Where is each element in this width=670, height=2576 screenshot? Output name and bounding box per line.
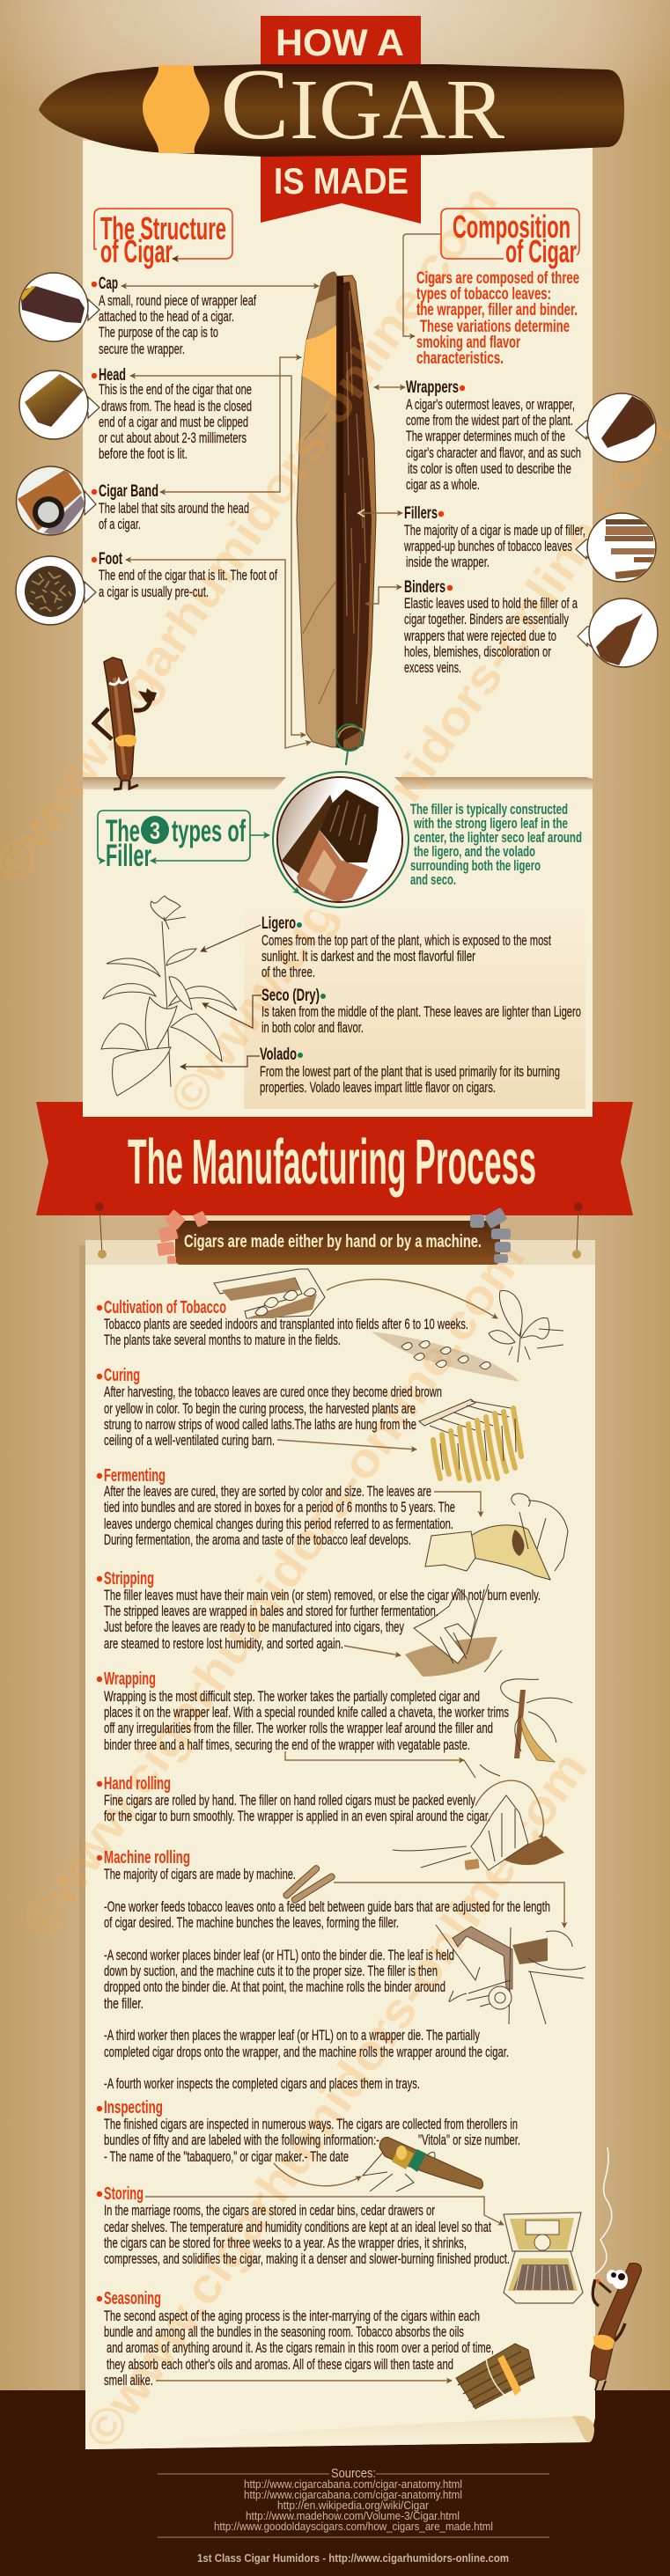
step: storing: In the marriage rooms, the cigars are stored in cedar bins, cedar drawers or [104, 2202, 435, 2219]
step: wrapping: Wrapping is the most difficult step. The worker takes the partially completed cigar and [104, 1688, 480, 1705]
footer credit: 1st Class Cigar Humidors - http://www.cigarhumidors-online.com [197, 2551, 509, 2565]
label: wrappers: cigar as a whole. [406, 476, 480, 493]
step: fermenting: leaves undergo chemical changes during this period referred to as fermentation. [104, 1516, 453, 1532]
step: fermenting: During fermentation, the aroma and taste of the tobacco leaf develops. [104, 1531, 411, 1548]
step: curing: After harvesting, the tobacco leaves are cured once they become dried brown [104, 1383, 442, 1400]
sources: http://www.cigarcabana.com/cigar-anatomy.html [244, 2478, 462, 2491]
step: seasoning [97, 2289, 494, 2389]
label: binders: cigar together. Binders are essentially [404, 611, 569, 627]
illustration: rolling hands [393, 1780, 564, 1870]
label: head: This is the end of the cigar that one [99, 381, 252, 398]
label: fillers: Fillers [404, 504, 438, 523]
label: head: end of a cigar and must be clipped [99, 414, 248, 430]
hanging strings and pins [95, 1202, 583, 1259]
step: hand rolling [97, 1774, 490, 1824]
sources: http://www.goodoldayscigars.com/how_cigars_are_made.html [214, 2521, 493, 2533]
title: is made: IS MADE [274, 160, 409, 202]
label: cap [92, 275, 319, 357]
step: storing: Storing [104, 2184, 144, 2204]
sign: made by hand or machine [157, 1207, 511, 1265]
label: binders [365, 578, 578, 676]
heading: the 3 types of filler: 3 [150, 818, 160, 844]
label: seco [202, 987, 581, 1036]
illustration: cigar inspection: "Vitola" or size number. [418, 2132, 520, 2148]
step: seasoning: The second aspect of the aging process is the inter-marrying of the cigars within each [104, 2308, 480, 2324]
illustration: two cigars and machine arrow [283, 1864, 564, 1927]
heading: composition of cigar: Composition [453, 209, 571, 245]
label: wrappers: cigar's character and flavor, and as such [406, 444, 581, 461]
red manufacturing banner [36, 1102, 633, 1215]
foot detail ring [336, 724, 363, 771]
heading: the 3 types of filler [98, 811, 269, 873]
label: fillers [358, 504, 585, 570]
step: fermenting: tied into bundles and are stored in boxes for a period of 6 months to 5 years. The [104, 1499, 455, 1516]
step: wrapping: binder three and a half times, securing the end of the wrapper with vegatable paste. [104, 1736, 470, 1753]
step: machine rolling: -A fourth worker inspects the completed cigars and places them in trays. [104, 2075, 420, 2092]
mascot: smoking cigar [590, 2147, 641, 2390]
composition description: Cigars are composed of three [416, 269, 579, 288]
step: fermenting: Fermenting [104, 1466, 166, 1486]
heading: the 3 types of filler: types of [172, 814, 246, 848]
illustration: fermenting worker [425, 1492, 568, 1580]
photo: binder leaf [578, 598, 658, 667]
sources: http://www.madehow.com/Volume-3/Cigar.html [246, 2510, 460, 2522]
heading: composition of cigar [403, 209, 579, 336]
heading: the structure of cigar: The Structure [100, 210, 226, 246]
step: machine rolling [97, 1848, 550, 2092]
step: stripping: are steamed to restore lost humidity, and sorted again. [104, 1635, 343, 1652]
illustration: cigar machine [436, 1925, 585, 2024]
label: wrappers: Wrappers [406, 378, 459, 397]
label: volado: properties. Volado leaves impart little flavor on cigars. [260, 1079, 496, 1096]
composition description: characteristics. [416, 349, 504, 368]
photo: foot [16, 556, 96, 625]
step: machine rolling: -A second worker places binder leaf (or HTL) onto the binder die. The leaf is held [104, 1947, 454, 1963]
step: seasoning: Seasoning [104, 2289, 161, 2308]
step: curing: Curing [104, 1366, 140, 1385]
heading: the structure of cigar: of Cigar [100, 233, 173, 269]
step: machine rolling: down by suction, and the machine cuts it to the proper size. The filler is then [104, 1963, 438, 1979]
heading: composition of cigar: of Cigar [505, 233, 577, 269]
step: inspecting: bundles of fifty and are labeled with the following information:- [104, 2132, 379, 2148]
label: seco: Seco (Dry) [261, 987, 320, 1005]
composition description: types of tobacco leaves: [416, 285, 551, 304]
illustration: cigar bundle [156, 2344, 534, 2409]
step: cultivation of tobacco [97, 1298, 468, 1348]
step: machine rolling: dropped onto the binder die. At that point, the machine rolls the binder around [104, 1978, 445, 1995]
heading: the 3 types of filler: Filler [106, 839, 151, 873]
step: hand rolling: Fine cigars are rolled by hand. The filler on hand rolled cigars must be packed evenly [104, 1792, 475, 1809]
label: head [92, 366, 306, 735]
mascot: thumbs up cigar [94, 657, 157, 789]
filler description: the ligero, and the volado [414, 843, 535, 860]
paper curl [85, 2416, 594, 2449]
big cigar cross-section [297, 272, 376, 750]
paper panel: anatomy and filler [83, 123, 593, 1117]
watermark: ©www.cigarhumidors-online.com [158, 407, 670, 1124]
label: ligero: sunlight. It is darkest and the most flavorful filler [261, 948, 475, 965]
label: head: draws from. The head is the closed [101, 398, 252, 415]
step: stripping [97, 1569, 541, 1652]
step: curing [97, 1366, 442, 1449]
filler description: surrounding both the ligero [410, 857, 541, 874]
step: seasoning: smell alike. [104, 2372, 153, 2389]
label: foot: a cigar is usually pre-cut. [99, 583, 209, 600]
photo: wrapper leaf [576, 393, 656, 462]
step: inspecting: - The name of the "tabaquero," or cigar maker.- The date [104, 2148, 349, 2165]
label: cigar band: of a cigar. [99, 516, 141, 532]
filler description: center, the lighter seco leaf around [414, 829, 582, 846]
step: storing [97, 2184, 510, 2267]
heading: the structure of cigar [94, 209, 232, 269]
filler description: with the strong ligero leaf in the [413, 815, 568, 832]
title ribbon [261, 16, 421, 224]
label: binders: excess veins. [404, 659, 461, 676]
label: cap: secure the wrapper. [99, 341, 185, 357]
photo: filler sticks [576, 513, 657, 582]
label: binders: holes, blemishes, discoloration or [404, 643, 551, 660]
step: wrapping: Wrapping [104, 1670, 156, 1689]
watermark: ©www.cigarhumidors-online.com [72, 1742, 598, 2458]
label: foot [92, 550, 311, 748]
step: curing: ceiling of a well-ventilated curing barn. [104, 1432, 275, 1449]
label: foot: Foot [99, 550, 122, 569]
step: cultivation of tobacco: Tobacco plants are seeded indoors and transplanted into fields after 6 to 10 weeks. [104, 1316, 468, 1332]
label: cap: Cap [99, 275, 118, 293]
step: curing: or yellow in color. To begin the curing process, the harvested plants are [104, 1400, 416, 1417]
paper panel: process [85, 1240, 595, 2449]
step: stripping: Just before the leaves are ready to be manufactured into cigars, they [104, 1618, 404, 1635]
label: wrappers: come from the widest part of the plant. [406, 412, 573, 429]
step: seasoning: they absorb each other's oils and aromas. All of these cigars will then taste and [107, 2356, 453, 2373]
composition description: These variations determine [420, 318, 570, 336]
illustration: stripping hands [344, 1584, 502, 1677]
heading: the 3 types of filler: The [106, 814, 140, 848]
illustration: cigar inspection [274, 2132, 520, 2191]
step: hand rolling: Hand rolling [104, 1774, 171, 1794]
label: binders: Elastic leaves used to hold the filler of a [404, 595, 578, 612]
step: fermenting [97, 1466, 455, 1548]
step: inspecting: Inspecting [104, 2098, 163, 2117]
label: seco: in both color and flavor. [261, 1019, 364, 1036]
filler description: and seco. [410, 871, 456, 888]
label: fillers: inside the wrapper. [406, 554, 490, 570]
step: machine rolling: of cigar desired. The machine bunches the leaves, forming the filler. [104, 1914, 399, 1931]
step: seasoning: bundle and among all the bundles in the seasoning room. Tobacco absorbs the oils [104, 2323, 464, 2340]
label: cap: The purpose of the cap is to [99, 324, 218, 341]
label: head: before the foot is lit. [99, 445, 188, 462]
label: binders: wrappers that were rejected due to [403, 627, 556, 644]
label: volado: Volado [260, 1046, 297, 1064]
photo: head [19, 371, 99, 439]
label: head: or cut about about 2-3 millimeters [99, 429, 247, 446]
photo: cigar band [16, 466, 96, 537]
step: cultivation of tobacco: Cultivation of Tobacco [104, 1298, 226, 1317]
hero cigar [39, 64, 624, 157]
label: binders: Binders [404, 578, 445, 597]
footer band [0, 2390, 670, 2576]
step: machine rolling: the filler. [104, 1995, 144, 2012]
label: volado [180, 1046, 560, 1096]
step: stripping: Stripping [104, 1569, 154, 1589]
watermark: ©www.cigarhumidors-online.com [10, 1231, 535, 1948]
photo: cap [19, 273, 99, 341]
step: stripping: The stripped leaves are wrapped in bales and stored for further fermentation. [104, 1603, 438, 1619]
label: wrappers [374, 378, 581, 493]
step: storing: the cigars can be stored for three weeks to a year. As the wrapper dries, it shrinks, [104, 2235, 467, 2251]
illustration: humidor [145, 2197, 583, 2303]
label: head: Head [99, 366, 126, 385]
label: wrappers: The wrapper determines much of the [406, 428, 565, 444]
composition description: smoking and flavor [416, 334, 520, 352]
step: machine rolling: -A third worker then places the wrapper leaf (or HTL) on to a wrapper die. The partially [104, 2027, 480, 2044]
filler description [410, 801, 582, 888]
step: cultivation of tobacco: The plants take several months to mature in the fields. [104, 1332, 341, 1348]
tobacco plant illustration [101, 896, 237, 1096]
detail: filler close-up [265, 765, 415, 914]
step: inspecting [97, 2098, 518, 2165]
sources: http://en.wikipedia.org/wiki/Cigar [277, 2499, 429, 2512]
composition description [416, 269, 579, 368]
label: ligero [201, 914, 551, 980]
sources [158, 2466, 549, 2537]
title: cigar: CIGAR [220, 48, 505, 161]
step: wrapping: off any irregularities from the filler. The worker rolls the wrapper leaf around the filler and [104, 1720, 493, 1736]
label: cigar band: The label that sits around the head [99, 500, 249, 517]
step: machine rolling: Machine rolling [104, 1848, 190, 1868]
illustration: seed tray and field plants [214, 1269, 563, 1382]
sources: http://www.cigarcabana.com/cigar-anatomy.html [244, 2489, 462, 2501]
label: ligero: of the three. [261, 964, 315, 980]
step: curing: strung to narrow strips of wood called laths.The laths are hung from the [104, 1416, 416, 1433]
filler description: The filler is typically constructed [410, 801, 568, 818]
label: wrappers: its color is often used to describe the [408, 460, 571, 477]
label: ligero: Ligero [261, 914, 296, 933]
step: wrapping [97, 1670, 509, 1753]
label: cap: attached to the head of a cigar. [99, 308, 234, 325]
label: cigar band: Cigar Band [99, 482, 158, 501]
step: machine rolling: The majority of cigars are made by machine. [104, 1866, 296, 1882]
step: fermenting: After the leaves are cured, they are sorted by color and size. The leaves are [104, 1483, 431, 1500]
panel: three filler descriptions box [244, 911, 585, 1109]
sources: Sources: [331, 2466, 376, 2481]
sign: made by hand or machine: Cigars are made either by hand or by a machine. [184, 1232, 482, 1251]
title: how a: HOW A [276, 22, 404, 64]
composition description: the wrapper, filler and binder. [416, 301, 578, 319]
label: foot: The end of the cigar that is lit. The foot of [99, 567, 277, 583]
label: cap: A small, round piece of wrapper leaf [99, 292, 256, 309]
label: cigar band [92, 357, 301, 532]
illustration: curing barn [277, 1399, 521, 1480]
label: wrappers: A cigar's outermost leaves, or wrapper, [406, 396, 575, 413]
label: fillers: wrapped-up bunches of tobacco leaves [403, 538, 572, 554]
illustration: wrapping hands [285, 1679, 572, 1778]
step: hand rolling: for the cigar to burn smoothly. The wrapper is applied in an even spiral around the cigar. [104, 1808, 490, 1824]
